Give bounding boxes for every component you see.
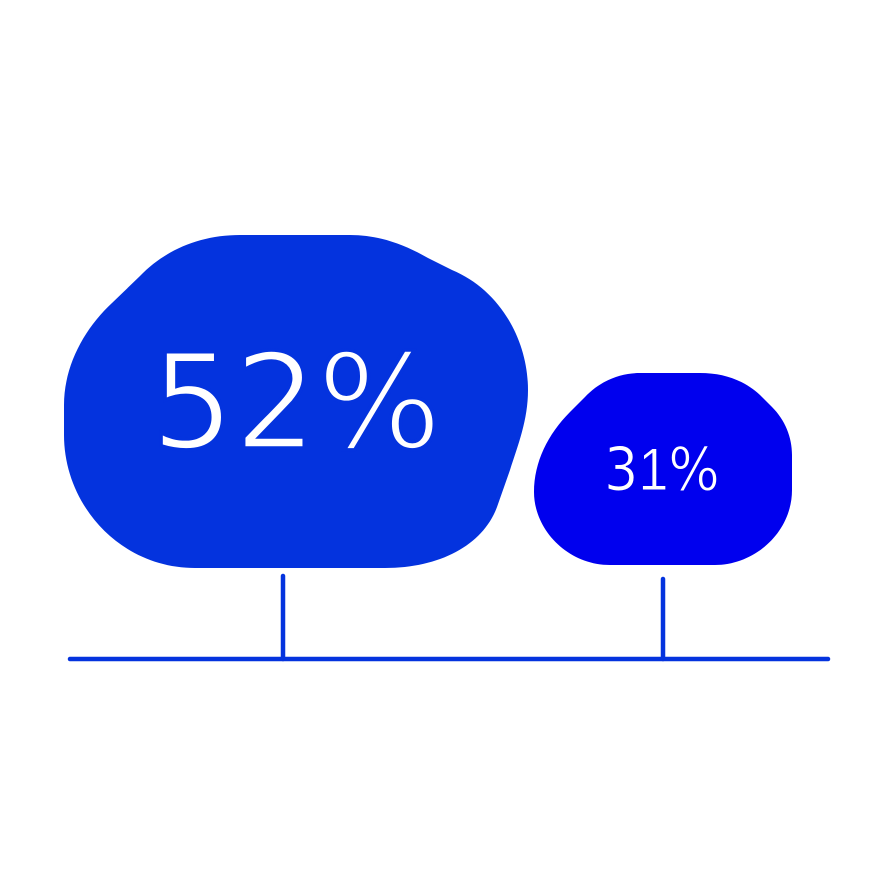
baseline: [70, 657, 828, 661]
axis with stems: [70, 576, 828, 659]
value: 31%: 31%: [604, 435, 720, 505]
stem: large blob: [281, 576, 285, 659]
small blob: 31%: [534, 373, 792, 565]
value: 52%: 52%: [151, 325, 441, 479]
large blob: 52%: [64, 235, 528, 568]
stem: small blob: [661, 579, 665, 659]
